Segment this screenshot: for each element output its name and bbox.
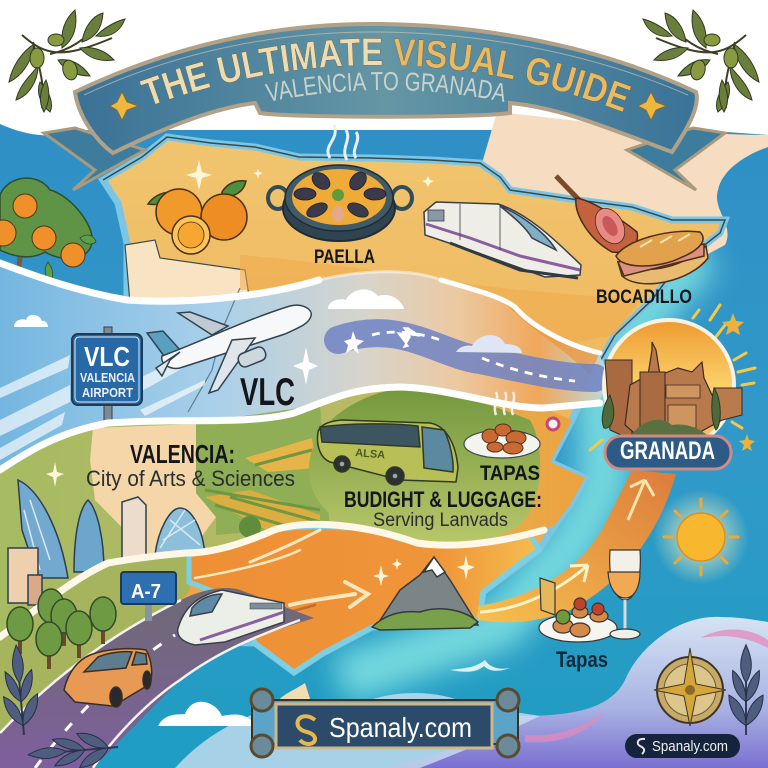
label: Tapas: Tapas [556, 647, 608, 672]
icon: mountain [372, 557, 478, 630]
sparkle [293, 347, 318, 385]
badge: Spanaly.com: Spanaly.com [652, 738, 728, 755]
band: countryside [0, 387, 585, 637]
label: paella: PAELLA [314, 247, 375, 268]
trees [7, 589, 116, 669]
laurel sprigs [0, 644, 763, 768]
icon: sandwich [616, 231, 708, 284]
sign: A-7: A-7 [131, 581, 161, 603]
inner peach province [125, 240, 250, 303]
icon: high-speed train [424, 202, 581, 278]
labels: tapas and luggage [344, 462, 542, 531]
coastal turquoise glow [340, 250, 700, 680]
labels: tapas and luggage: TAPAS [480, 462, 540, 485]
band: orange south land [189, 527, 539, 672]
Spain coast outline [103, 137, 725, 370]
icon: airplane [147, 305, 311, 393]
motion streaks and arrow [195, 530, 368, 625]
orange arrow to Granada [478, 470, 676, 622]
green hill circle [309, 388, 540, 544]
ribbon star right [638, 92, 666, 120]
northern peach land [480, 112, 768, 290]
Spain land [103, 137, 725, 672]
sign: VLC Valencia Airport: AIRPORT [82, 385, 133, 400]
subtitle: VALENCIA TO GRANADA [264, 72, 504, 102]
band: sky [0, 263, 612, 470]
icon: tapas and wine [539, 550, 640, 642]
flight path ribbon [338, 328, 595, 381]
orange land in sky band [500, 298, 600, 375]
label: Valencia: City of Arts & Sciences [86, 466, 295, 491]
sky contrails [0, 345, 212, 460]
subtitle [264, 72, 504, 102]
pale bottom band [175, 693, 540, 768]
Granada label pill: GRANADA [620, 437, 715, 465]
labels: tapas and luggage: Serving Lanvads [373, 510, 508, 531]
label: Valencia: VALENCIA: [130, 439, 235, 469]
icon: train on road [178, 590, 284, 645]
icon: sun [653, 489, 749, 585]
Granada medallion [590, 305, 755, 451]
icon: ALSA bus: ALSA [355, 447, 386, 462]
labels: tapas and luggage: BUDIGHT & LUGGAGE: [344, 487, 542, 512]
cloud [158, 702, 255, 726]
Granada label pill [605, 436, 731, 469]
icon: jamon leg [556, 176, 637, 252]
band: green field [0, 553, 190, 733]
label: Valencia [86, 439, 295, 491]
pink stripes [525, 630, 768, 742]
footer scroll [251, 689, 519, 757]
badge: Spanaly.com [625, 734, 740, 758]
sign: VLC Valencia Airport: VALENCIA [80, 370, 136, 385]
orange land highlight [240, 255, 640, 345]
icon: orange tree [0, 178, 96, 282]
sparkles [186, 160, 475, 586]
olive branch left [9, 10, 125, 112]
icon: oranges [148, 181, 247, 254]
icon: compass [654, 648, 726, 726]
ribbon star left [110, 92, 138, 120]
icon: tapas plate with steam [464, 392, 540, 458]
white wave lines [0, 263, 600, 637]
title ribbon [44, 24, 725, 190]
title text [139, 38, 632, 112]
footer scroll: Spanaly.com [329, 712, 472, 743]
sign: A-7 [121, 572, 176, 621]
clouds [14, 289, 404, 327]
faint land border [188, 288, 240, 412]
sign: VLC Valencia Airport: VLC [84, 341, 130, 372]
location pin [547, 418, 559, 430]
city of arts and sciences [8, 480, 205, 605]
bottom wave [380, 617, 768, 768]
label: VLC: VLC [240, 371, 295, 414]
small land behind scroll [275, 683, 312, 705]
icon: paella pan [268, 125, 412, 241]
road [0, 588, 314, 768]
icon: ALSA bus [318, 420, 458, 485]
sparkle [46, 462, 64, 487]
peach land west [90, 424, 216, 556]
label: bocadillo: BOCADILLO [596, 287, 692, 308]
farm fields [196, 405, 330, 538]
olive branch right [643, 10, 759, 112]
sign: VLC Valencia Airport [72, 327, 142, 427]
icon: car [64, 649, 152, 707]
small wave [450, 660, 510, 672]
